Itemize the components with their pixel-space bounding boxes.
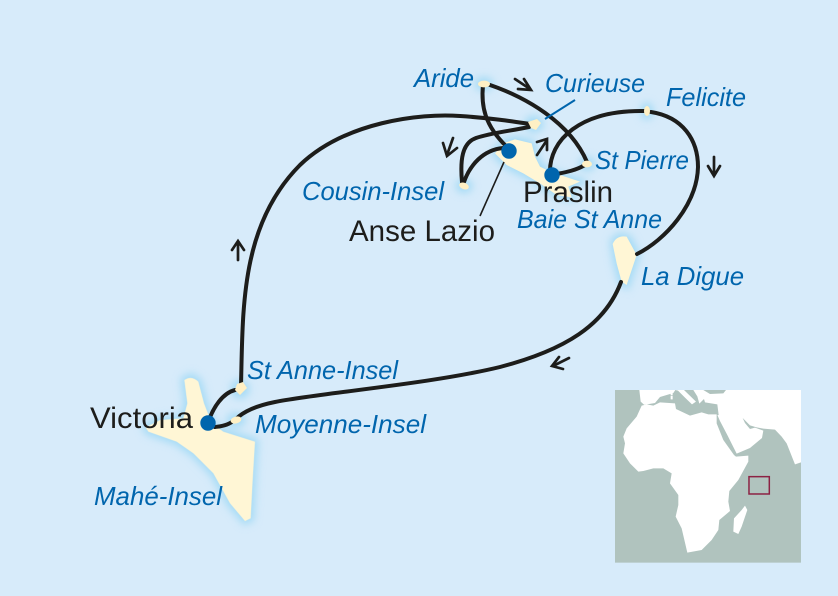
- Madagascar: [733, 506, 747, 534]
- label: Baie St Anne: Baie St Anne: [517, 204, 662, 234]
- leader line: Curieuse: [545, 100, 575, 119]
- island: Mahé: [146, 378, 255, 521]
- island glow: [146, 80, 650, 521]
- island: Aride: [478, 81, 490, 87]
- island: Cousin: [458, 181, 470, 191]
- Black Sea: [703, 390, 726, 394]
- island: Felicite: [644, 106, 650, 116]
- inset sea: [615, 390, 801, 563]
- label: Mahé-Insel: Mahé-Insel: [94, 481, 223, 511]
- location marker: [749, 477, 769, 494]
- port markers: [200, 143, 560, 431]
- Sardinia and Corsica: [671, 392, 673, 399]
- label: St Anne-Insel: St Anne-Insel: [247, 355, 399, 385]
- island: La Digue: [613, 236, 637, 285]
- Africa: [623, 402, 748, 553]
- Eurasia and Arabia: [639, 390, 801, 464]
- island: Curieuse: [528, 119, 541, 130]
- Mediterranean Sea: [643, 390, 719, 418]
- direction arrows: [232, 79, 720, 369]
- label: Cousin-Insel: Cousin-Insel: [302, 176, 445, 206]
- island: Moyenne: [230, 415, 242, 425]
- leader line: Anse Lazio: [480, 162, 504, 216]
- label: Victoria: Victoria: [90, 402, 193, 435]
- label: Aride: Aride: [412, 63, 474, 93]
- small islands: [230, 81, 650, 425]
- island: St Anne: [235, 382, 247, 395]
- label: Anse Lazio: Anse Lazio: [349, 215, 495, 248]
- label: Felicite: Felicite: [666, 82, 746, 112]
- island: St Pierre: [582, 161, 592, 167]
- route lines: [208, 85, 698, 427]
- large islands: [146, 80, 650, 521]
- label: La Digue: La Digue: [641, 261, 744, 291]
- label: Moyenne-Insel: Moyenne-Insel: [255, 409, 427, 439]
- label: St Pierre: St Pierre: [595, 145, 689, 175]
- label: Praslin: Praslin: [523, 176, 613, 209]
- label: Curieuse: Curieuse: [545, 68, 645, 98]
- island: Praslin: [495, 139, 580, 197]
- inset locator map: [615, 390, 801, 563]
